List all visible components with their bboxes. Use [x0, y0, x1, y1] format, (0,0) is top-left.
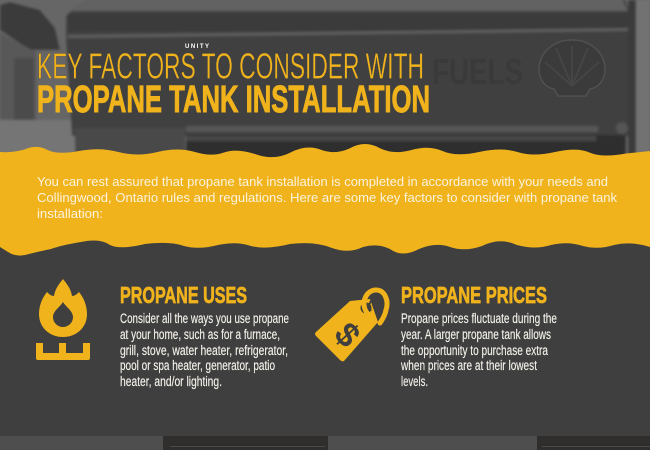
dark lower panel	[0, 235, 650, 436]
body text: propane prices: year. A larger propane tank allows	[401, 327, 551, 342]
intro paragraph: You can rest assured that propane tank installation is completed in accordance with your needs and	[37, 174, 608, 189]
body text: propane uses: Consider all the ways you use propane	[120, 311, 289, 326]
body text: propane prices: Propane prices fluctuate during the	[401, 311, 557, 326]
body text: propane uses: pool or spa heater, generator, patio	[120, 358, 275, 373]
intro paragraph	[37, 174, 617, 221]
icon: price tag: $	[327, 315, 368, 355]
heading: propane uses: PROPANE USES	[120, 282, 247, 308]
icon: price tag	[315, 290, 387, 361]
bottom photo strip	[0, 436, 650, 450]
intro paragraph: Collingwood, Ontario rules and regulations. Here are some key factors to consider with propane tank	[37, 190, 617, 205]
faded truck lettering: FUELS: FUELS	[432, 51, 523, 92]
title: KEY FACTORS TO CONSIDER WITH	[37, 46, 424, 86]
title: PROPANE TANK INSTALLATION	[37, 79, 430, 121]
background photo: propane truck tank	[0, 0, 650, 165]
icon: flame on burner	[36, 279, 90, 360]
heading: propane prices: PROPANE PRICES	[401, 282, 547, 308]
body text: propane uses: heater, and/or lighting.	[120, 374, 222, 389]
title	[37, 46, 430, 121]
body text: propane uses: grill, stove, water heater, refrigerator,	[120, 343, 288, 358]
faded shell logo	[539, 40, 605, 96]
brand mark: UNITY: UNITY	[185, 44, 209, 50]
intro paragraph: installation:	[37, 206, 103, 221]
body text: propane uses	[120, 311, 289, 389]
body text: propane prices: levels.	[401, 374, 428, 389]
body text: propane uses: at your home, such as for a furnace,	[120, 327, 280, 342]
body text: propane prices: the opportunity to purchase extra	[401, 343, 548, 358]
body text: propane prices: when prices are at their lowest	[400, 358, 537, 373]
yellow wavy intro band	[0, 144, 650, 256]
body text: propane prices	[400, 311, 557, 389]
